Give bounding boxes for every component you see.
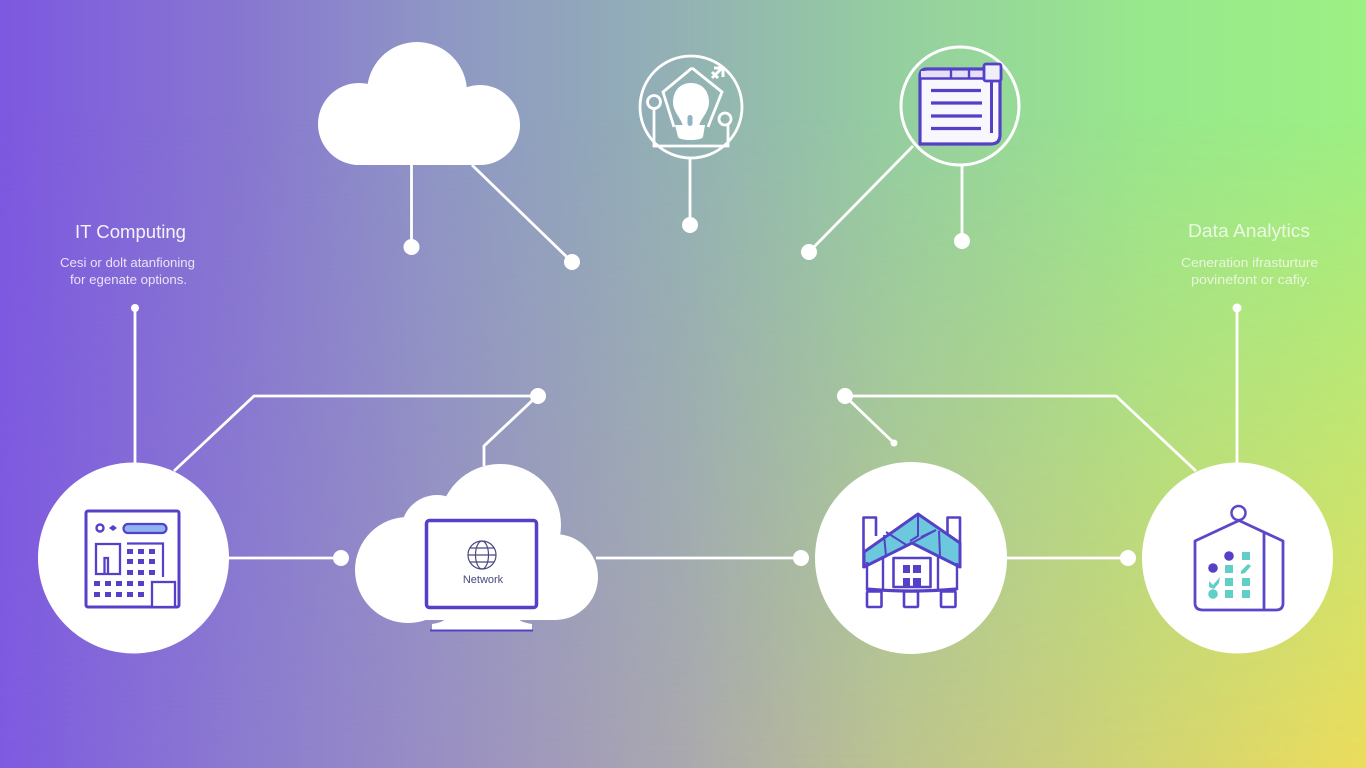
icon: monitor <box>426 520 536 631</box>
connector: computing node to upper junction <box>174 388 546 471</box>
description: Data Analytics: povinefont or cafiy. <box>1191 272 1310 287</box>
connector: short diagonal to building node <box>847 398 898 446</box>
icon: document window in circle <box>901 47 1019 165</box>
cloud connector: vertical <box>404 165 420 255</box>
icon: house with glass roof <box>864 514 960 607</box>
node: IT computing <box>38 462 229 654</box>
icon: tagged building with data grid <box>1195 506 1283 610</box>
connector: IT Computing label to node <box>131 304 139 465</box>
text block: IT Computing <box>60 221 195 287</box>
node: building <box>815 462 1007 654</box>
description: IT Computing: Cesi or dolt atanfioning <box>60 255 195 270</box>
node: network cloud <box>355 464 598 631</box>
connector: analytics node to upper junction <box>837 388 1196 471</box>
description: IT Computing: for egenate options. <box>70 272 187 287</box>
icon: light bulb in circle <box>640 56 742 158</box>
heading: IT Computing: IT Computing <box>75 221 186 242</box>
connector: network cloud to upper junction <box>484 398 535 466</box>
top-left cloud icon <box>318 42 520 165</box>
description: Data Analytics: Ceneration ifrasturture <box>1181 255 1318 270</box>
bulb connector <box>682 158 698 233</box>
node: data analytics <box>1142 462 1333 654</box>
icon: control panel <box>86 511 179 607</box>
connector: Data Analytics label to node <box>1232 304 1242 465</box>
text block: Data Analytics <box>1181 220 1318 287</box>
connector: network to building <box>596 550 809 566</box>
document connector: diagonal <box>801 146 913 260</box>
connector: building to analytics <box>1006 550 1136 566</box>
connector: computing to network <box>228 550 349 566</box>
icon: globe <box>468 541 496 569</box>
document connector: vertical <box>954 166 970 249</box>
description: IT Computing <box>60 255 195 287</box>
label: Network: Network <box>463 574 504 586</box>
heading: Data Analytics: Data Analytics <box>1188 220 1310 241</box>
cloud connector: diagonal <box>472 165 580 270</box>
description: Data Analytics <box>1181 255 1318 287</box>
